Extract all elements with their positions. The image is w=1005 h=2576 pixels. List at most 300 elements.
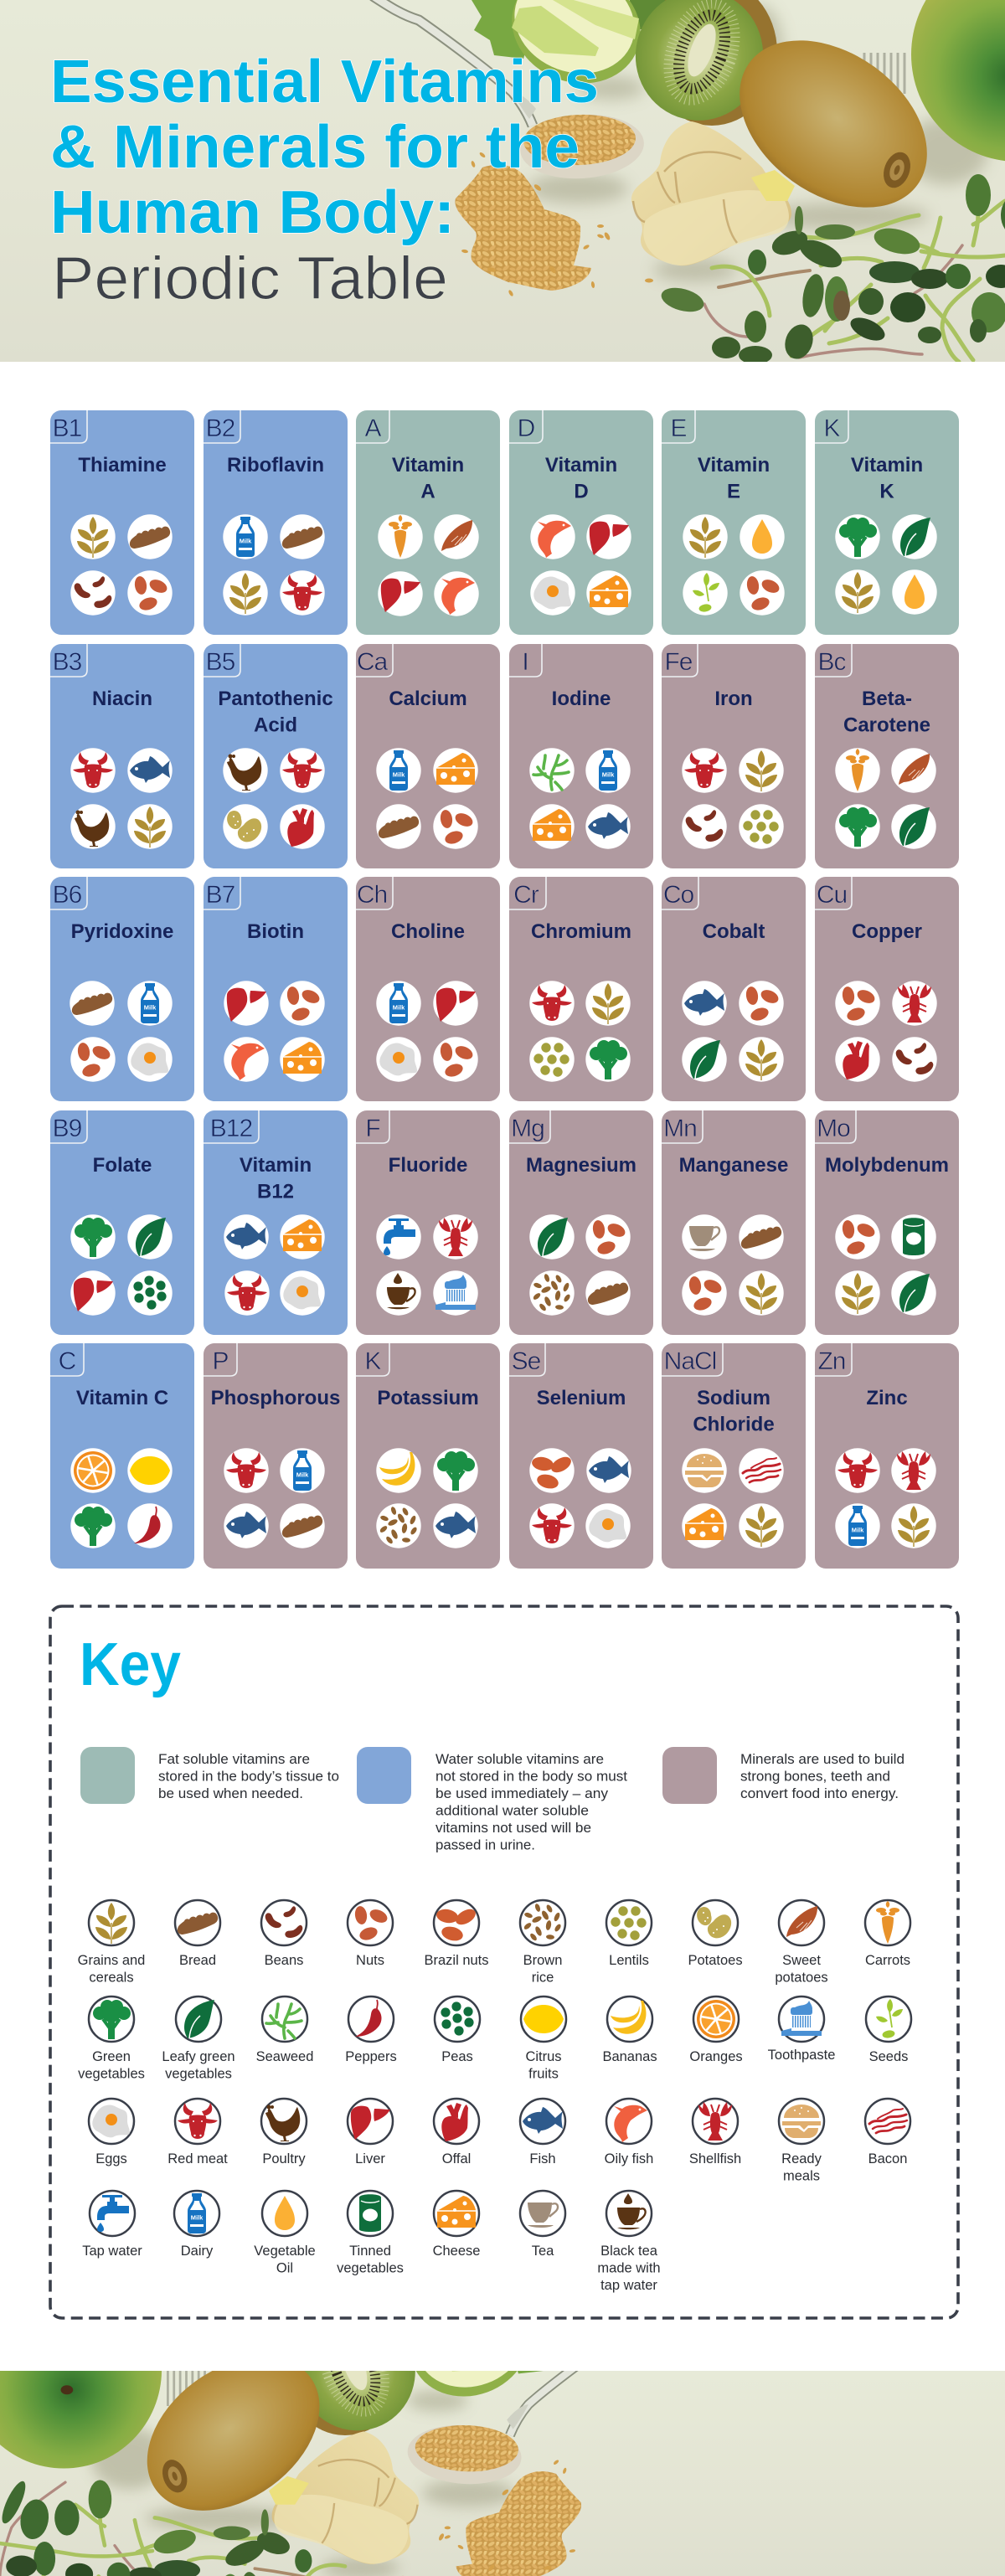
icon: vegetable oil xyxy=(892,569,937,615)
key item: ready meals xyxy=(779,2099,824,2184)
icon: liver xyxy=(586,514,631,559)
key item: oranges xyxy=(689,1996,743,2064)
card: Cu Copper xyxy=(815,877,959,1101)
legend: minerals: Minerals are used to build xyxy=(740,1752,904,1767)
icon: oily fish xyxy=(224,1037,269,1082)
legend: water soluble vitamins: additional water soluble xyxy=(436,1804,589,1819)
icon: cheese xyxy=(586,570,631,616)
card: D Vitamin D: Vitamin xyxy=(545,454,617,477)
icon: dairy xyxy=(127,981,173,1026)
icon: offal xyxy=(280,804,325,849)
icon: nuts xyxy=(585,1214,631,1260)
icon: beans xyxy=(892,1037,937,1082)
card: Bc Beta-Carotene xyxy=(815,644,959,868)
legend: water soluble vitamins: vitamins not used will be xyxy=(436,1821,591,1836)
key item: leafy green vegetables: Leafy green xyxy=(162,2049,235,2064)
key item: fish: Fish xyxy=(529,2151,556,2166)
card: F Fluoride xyxy=(356,1110,500,1335)
icon: brown rice xyxy=(376,1503,421,1548)
card: Cr Chromium: Chromium xyxy=(531,920,631,943)
icon: vegetable oil xyxy=(740,514,785,559)
key item: poultry xyxy=(261,2099,307,2166)
icon: grains xyxy=(891,1503,936,1548)
key item: bacon xyxy=(865,2099,910,2166)
icon: eggs xyxy=(530,570,575,616)
key item: oranges: Oranges xyxy=(689,2049,743,2064)
key item: cheese: Cheese xyxy=(433,2244,480,2259)
card: E Vitamin E xyxy=(662,410,806,635)
key item: peppers: Peppers xyxy=(345,2049,397,2064)
card: D Vitamin D: D xyxy=(574,481,589,502)
icon: grains xyxy=(683,514,728,559)
icon: red meat xyxy=(280,748,325,793)
card: Mo Molybdenum: Mo xyxy=(817,1115,850,1142)
key item: carrots: Carrots xyxy=(865,1953,910,1968)
title: Human Body: xyxy=(50,179,455,246)
icon: nuts xyxy=(835,1214,880,1260)
icon: cheese xyxy=(280,1037,325,1082)
key item: dairy: Dairy xyxy=(181,2244,214,2259)
card: Fe Iron: Fe xyxy=(664,648,693,676)
key item: ready meals: meals xyxy=(783,2169,820,2184)
card: Ca Calcium: Ca xyxy=(357,648,388,676)
card: K Vitamin K xyxy=(815,410,959,635)
card: E Vitamin E: Vitamin xyxy=(698,454,770,477)
card: Mn Manganese xyxy=(662,1110,806,1335)
icon: oily fish xyxy=(434,571,479,616)
card: B6 Pyridoxine: B6 xyxy=(53,881,82,909)
icon: nuts xyxy=(739,981,784,1026)
legend: minerals: convert food into energy. xyxy=(740,1786,899,1801)
key heading: Key xyxy=(80,1631,181,1698)
key item: nuts: Nuts xyxy=(356,1953,384,1968)
key item: grains and cereals xyxy=(78,1900,145,1985)
icon: grains xyxy=(70,514,116,559)
legend: fat soluble vitamins xyxy=(80,1747,339,1804)
icon: green vegetables xyxy=(585,1037,631,1082)
icon: oranges xyxy=(70,1448,116,1493)
card: NaCl Sodium Chloride: Sodium xyxy=(697,1387,770,1409)
icon: fish xyxy=(224,1214,269,1260)
card: Cr Chromium: Cr xyxy=(513,881,539,909)
card: K Vitamin K: K xyxy=(879,481,894,502)
key item: green vegetables: Green xyxy=(92,2049,131,2064)
legend: fat soluble vitamins: be used when needed. xyxy=(158,1786,303,1801)
icon: shellfish xyxy=(892,981,937,1026)
card: Zn Zinc xyxy=(815,1343,959,1569)
key item: shellfish xyxy=(689,2099,741,2166)
key item: tap water xyxy=(82,2191,142,2259)
key item: eggs xyxy=(89,2099,134,2166)
icon: cheese xyxy=(433,748,478,793)
key item: potatoes xyxy=(688,1900,743,1968)
card: B1 Thiamine: B1 xyxy=(53,415,82,442)
card: Zn Zinc: Zinc xyxy=(866,1387,908,1409)
key item: carrots xyxy=(865,1900,910,1968)
card: E Vitamin E: E xyxy=(670,415,687,442)
icon: eggs xyxy=(376,1037,421,1082)
icon: grains xyxy=(585,981,631,1026)
card: Fe Iron: Iron xyxy=(714,688,753,710)
card: B2 Riboflavin xyxy=(204,410,348,635)
card: C Vitamin C xyxy=(50,1343,194,1569)
key item: offal: Offal xyxy=(442,2151,471,2166)
icon: bread xyxy=(127,514,173,559)
legend: fat soluble vitamins: stored in the body’s tissue to xyxy=(158,1769,339,1784)
icon: offal xyxy=(835,1037,880,1082)
icon: eggs xyxy=(127,1037,173,1082)
key item: vegetable oil xyxy=(254,2191,316,2276)
icon: tea xyxy=(682,1214,727,1260)
panel: key xyxy=(50,1606,958,2318)
key item: black tea made with tap water: made with xyxy=(597,2261,661,2276)
icon: fish xyxy=(682,981,727,1026)
icon: bread xyxy=(280,1503,325,1548)
card: K Potassium: Potassium xyxy=(377,1387,479,1409)
icon: eggs xyxy=(280,1270,325,1316)
icon: fish xyxy=(585,804,631,849)
icon: red meat xyxy=(835,1448,880,1493)
key item: vegetable oil: Vegetable xyxy=(254,2244,316,2259)
legend: water soluble vitamins xyxy=(357,1747,627,1852)
icon: liver xyxy=(70,1270,116,1316)
icon: brazil nuts xyxy=(529,1448,575,1493)
icon: fish xyxy=(586,1448,631,1493)
key item: vegetable oil: Oil xyxy=(276,2261,293,2276)
card: B12 Vitamin B12: Vitamin xyxy=(240,1154,312,1177)
icon: oily fish xyxy=(530,514,575,559)
card: P Phosphorous xyxy=(204,1343,348,1569)
key item: potatoes: Potatoes xyxy=(688,1953,743,1968)
icon: sweet potatoes xyxy=(434,514,479,559)
icon: poultry xyxy=(70,804,116,849)
card: Mg Magnesium xyxy=(509,1110,653,1335)
key item: liver: Liver xyxy=(355,2151,385,2166)
key item: shellfish: Shellfish xyxy=(689,2151,741,2166)
icon: toothpaste xyxy=(433,1270,478,1316)
card: B2 Riboflavin: Riboflavin xyxy=(227,454,324,477)
header photo banner xyxy=(0,0,1005,364)
key item: peppers xyxy=(345,1996,397,2064)
card: Se Selenium xyxy=(509,1343,653,1569)
icon: bananas xyxy=(376,1448,421,1493)
key item: red meat xyxy=(168,2099,228,2166)
icon: leafy greens xyxy=(892,514,937,559)
icon: nuts xyxy=(740,570,785,616)
key item: ready meals: Ready xyxy=(781,2151,822,2166)
key item: oily fish xyxy=(605,2099,653,2166)
card: B12 Vitamin B12 xyxy=(204,1110,348,1335)
key item: red meat: Red meat xyxy=(168,2151,228,2166)
key item: tinned vegetables: Tinned xyxy=(349,2244,391,2259)
icon: citrus fruits xyxy=(127,1448,173,1493)
key item: tea: Tea xyxy=(532,2244,554,2259)
card: B1 Thiamine: Thiamine xyxy=(78,454,167,477)
icon: bread xyxy=(70,981,115,1026)
card: Zn Zinc: Zn xyxy=(817,1347,846,1375)
card: C Vitamin C: C xyxy=(59,1347,76,1375)
icon: lentils xyxy=(529,1037,575,1082)
key item: citrus fruits: Citrus xyxy=(525,2049,562,2064)
icon: brown rice xyxy=(529,1270,575,1316)
key item: peas xyxy=(435,1996,480,2064)
icon: seaweed xyxy=(529,748,575,793)
card: Bc Beta-Carotene: Carotene xyxy=(843,714,930,737)
title: Periodic Table xyxy=(52,245,448,312)
key item: black tea made with tap water: Black tea xyxy=(600,2244,658,2259)
title xyxy=(50,49,599,312)
icon: bread xyxy=(280,514,325,559)
icon: shellfish xyxy=(891,1448,936,1493)
card: Mn Manganese: Mn xyxy=(663,1115,697,1142)
key item: leafy green vegetables: vegetables xyxy=(165,2067,232,2082)
icon: red meat xyxy=(70,748,116,793)
card: D Vitamin D xyxy=(509,410,653,635)
card: B3 Niacin: Niacin xyxy=(92,688,152,710)
card: B3 Niacin xyxy=(50,644,194,868)
card: A Vitamin A: Vitamin xyxy=(392,454,464,477)
icon: peppers xyxy=(127,1503,173,1548)
icon: leafy greens xyxy=(529,1214,575,1260)
card: K Vitamin K: K xyxy=(823,415,840,442)
key item: green vegetables xyxy=(78,1996,145,2082)
icon: nuts xyxy=(835,981,880,1026)
card: F Fluoride: Fluoride xyxy=(389,1154,467,1177)
key item: grains and cereals: Grains and xyxy=(78,1953,145,1968)
card: D Vitamin D: D xyxy=(518,415,535,442)
key item: seaweed: Seaweed xyxy=(256,2049,313,2064)
legend: water soluble vitamins: passed in urine. xyxy=(436,1837,535,1852)
card: NaCl Sodium Chloride xyxy=(662,1343,806,1569)
icon: potatoes xyxy=(223,804,268,849)
key item: black tea made with tap water xyxy=(597,2191,661,2293)
card: K Potassium: K xyxy=(364,1347,381,1375)
key item: brown rice: Brown xyxy=(523,1953,562,1968)
key item: citrus fruits: fruits xyxy=(528,2067,559,2082)
icon: grains xyxy=(127,804,173,849)
icon: liver xyxy=(378,571,423,616)
card: B5 Pantothenic Acid xyxy=(204,644,348,868)
icon: tinned vegetables xyxy=(891,1214,936,1260)
icon: tap water xyxy=(376,1214,421,1260)
icon: poultry xyxy=(223,748,268,793)
key item: seeds xyxy=(866,1996,911,2064)
icon: grains xyxy=(835,1270,880,1316)
card: Bc Beta-Carotene: Beta- xyxy=(862,688,912,710)
card: Cr Chromium xyxy=(509,877,653,1101)
icon: grains xyxy=(739,1270,784,1316)
icon: dairy xyxy=(376,748,421,793)
icon: red meat xyxy=(682,748,727,793)
key item: offal xyxy=(434,2099,479,2166)
icon: fish xyxy=(433,1503,478,1548)
legend: water soluble vitamins: be used immediately – any xyxy=(436,1786,609,1801)
icon: cheese xyxy=(529,804,575,849)
card: Fe Iron xyxy=(662,644,806,868)
key item: seeds: Seeds xyxy=(869,2049,908,2064)
title: & Minerals for the xyxy=(50,114,580,181)
icon: red meat xyxy=(529,981,575,1026)
key item: oily fish: Oily fish xyxy=(605,2151,653,2166)
card: Mo Molybdenum xyxy=(815,1110,959,1335)
card: B9 Folate xyxy=(50,1110,194,1335)
key item: tinned vegetables xyxy=(337,2191,404,2276)
card: B7 Biotin xyxy=(204,877,348,1101)
card: B6 Pyridoxine xyxy=(50,877,194,1101)
card: Cu Copper: Copper xyxy=(852,920,922,943)
key item: brown rice xyxy=(520,1900,565,1985)
card: B7 Biotin: Biotin xyxy=(247,920,304,943)
legend: water soluble vitamins: Water soluble vitamins are xyxy=(436,1752,604,1767)
icon: leafy greens xyxy=(127,1214,173,1260)
icon: nuts xyxy=(280,981,325,1026)
icon: beans xyxy=(70,570,116,616)
icon: red meat xyxy=(224,1270,270,1316)
key item: bacon: Bacon xyxy=(868,2151,907,2166)
icon: cheese xyxy=(682,1503,727,1548)
icon: grains xyxy=(223,570,268,616)
legend: fat soluble vitamins: Fat soluble vitamins are xyxy=(158,1752,310,1767)
icon: lentils xyxy=(739,804,784,849)
legend: minerals: strong bones, teeth and xyxy=(740,1769,890,1784)
icon: dairy xyxy=(585,748,631,793)
icon: grains xyxy=(835,569,880,615)
card: P Phosphorous: P xyxy=(212,1347,229,1375)
icon: bacon xyxy=(739,1448,784,1493)
card: NaCl Sodium Chloride: NaCl xyxy=(664,1347,716,1375)
card: I Iodine xyxy=(509,644,653,868)
card: I Iodine: Iodine xyxy=(552,688,611,710)
icon: nuts xyxy=(433,1037,478,1082)
card: B5 Pantothenic Acid: Acid xyxy=(254,714,297,737)
card: A Vitamin A: A xyxy=(364,415,381,442)
icon: dairy xyxy=(376,981,421,1026)
card: Se Selenium: Se xyxy=(512,1347,541,1375)
icon: liver xyxy=(224,981,269,1026)
icon: peas xyxy=(127,1270,173,1316)
icon: green vegetables xyxy=(835,514,880,559)
key item: fish xyxy=(520,2099,565,2166)
icon: leafy greens xyxy=(891,804,936,849)
icon: green vegetables xyxy=(70,1214,116,1260)
card: B6 Pyridoxine: Pyridoxine xyxy=(71,920,173,943)
key item: brazil nuts xyxy=(424,1900,489,1968)
card: NaCl Sodium Chloride: Chloride xyxy=(693,1414,775,1435)
key item: leafy green vegetables xyxy=(162,1996,235,2082)
icon: beans xyxy=(682,804,727,849)
icon: nuts xyxy=(433,804,478,849)
icon: grains xyxy=(739,1037,784,1082)
card: Mg Magnesium: Mg xyxy=(511,1115,544,1142)
card: A Vitamin A: A xyxy=(420,481,436,502)
icon: grains xyxy=(739,748,784,793)
card: Ch Choline xyxy=(356,877,500,1101)
key item: poultry: Poultry xyxy=(262,2151,306,2166)
icon: ready meals xyxy=(682,1448,727,1493)
key item: sweet potatoes: Sweet xyxy=(782,1953,821,1968)
card: Co Cobalt: Co xyxy=(663,881,693,909)
icon: fish xyxy=(127,748,173,793)
icon: green vegetables xyxy=(433,1448,478,1493)
title: Essential Vitamins xyxy=(50,49,599,116)
icon: red meat xyxy=(224,1448,269,1493)
key item: cheese xyxy=(433,2191,480,2259)
icon: carrots xyxy=(378,514,423,559)
key item: dairy xyxy=(174,2191,219,2259)
icon: bread xyxy=(376,804,421,849)
icon: fish xyxy=(224,1503,269,1548)
card: Mo Molybdenum: Molybdenum xyxy=(825,1154,949,1177)
card: K Potassium xyxy=(356,1343,500,1569)
key item: bananas xyxy=(602,1996,657,2064)
icon: bread xyxy=(739,1214,784,1260)
key item: tap water: Tap water xyxy=(82,2244,142,2259)
icon: liver xyxy=(433,981,478,1026)
key item: peas: Peas xyxy=(441,2049,473,2064)
card: Ca Calcium xyxy=(356,644,500,868)
icon: eggs xyxy=(585,1503,631,1548)
card: B3 Niacin: B3 xyxy=(53,648,82,676)
card: A Vitamin A xyxy=(356,410,500,635)
card: Bc Beta-Carotene: Bc xyxy=(817,648,847,676)
key item: green vegetables: vegetables xyxy=(78,2067,145,2082)
card: Ch Choline: Choline xyxy=(391,920,465,943)
card: Mn Manganese: Manganese xyxy=(679,1154,788,1177)
icon: cheese xyxy=(280,1214,325,1260)
card: B12 Vitamin B12: B12 xyxy=(257,1181,294,1203)
card: Co Cobalt: Cobalt xyxy=(703,920,765,943)
key item: seaweed xyxy=(256,1996,313,2064)
key item: tea xyxy=(520,2191,565,2259)
icon: nuts xyxy=(70,1037,116,1082)
card: B2 Riboflavin: B2 xyxy=(206,415,235,442)
key item: nuts xyxy=(348,1900,393,1968)
icon: red meat xyxy=(280,570,325,616)
icon: nuts xyxy=(682,1270,727,1316)
card: B5 Pantothenic Acid: B5 xyxy=(206,648,235,676)
icon: bread xyxy=(585,1270,631,1316)
card: I Iodine: I xyxy=(522,648,528,676)
card: Cu Copper: Cu xyxy=(817,881,847,909)
icon: seeds xyxy=(683,570,728,616)
card: K Vitamin K: Vitamin xyxy=(851,454,923,477)
icon: shellfish xyxy=(433,1214,478,1260)
key item: lentils: Lentils xyxy=(609,1953,649,1968)
key item: toothpaste: Toothpaste xyxy=(768,2048,835,2063)
icon: carrots xyxy=(835,748,880,793)
card: Mg Magnesium: Magnesium xyxy=(526,1154,636,1177)
icon: sweet potatoes xyxy=(891,748,936,793)
key item: sweet potatoes: potatoes xyxy=(775,1970,828,1985)
card: B1 Thiamine xyxy=(50,410,194,635)
icon: grains xyxy=(739,1503,784,1548)
icon: black tea xyxy=(376,1270,421,1316)
key item: tinned vegetables: vegetables xyxy=(337,2261,404,2276)
icon: green vegetables xyxy=(70,1503,116,1548)
card: B9 Folate: B9 xyxy=(53,1115,82,1142)
card: P Phosphorous: Phosphorous xyxy=(211,1387,340,1409)
legend: water soluble vitamins: not stored in the body so must xyxy=(436,1769,627,1784)
key item: brown rice: rice xyxy=(532,1970,554,1985)
card: B7 Biotin: B7 xyxy=(206,881,235,909)
key item: citrus fruits xyxy=(521,1996,566,2082)
icon: leafy greens xyxy=(891,1270,936,1316)
key item: bananas: Bananas xyxy=(602,2049,657,2064)
icon: red meat xyxy=(529,1503,575,1548)
key item: brazil nuts: Brazil nuts xyxy=(424,1953,489,1968)
card: Se Selenium: Selenium xyxy=(537,1387,626,1409)
card: Co Cobalt xyxy=(662,877,806,1101)
